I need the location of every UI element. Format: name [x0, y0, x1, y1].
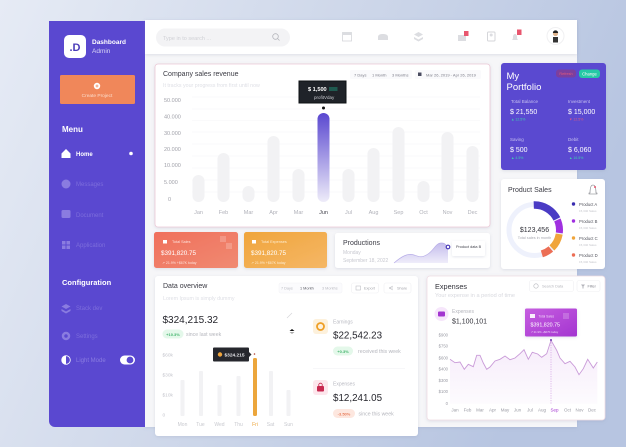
- search box: Search Data: [542, 284, 564, 288]
- nav: stack dev: Stack dev: [76, 306, 102, 312]
- logo: [64, 35, 86, 58]
- month labels: Aug: [369, 210, 378, 216]
- avatar: [547, 28, 564, 44]
- search box: Type in to search ...: [163, 36, 211, 42]
- stat: earnings: received this week: [358, 349, 401, 355]
- nav: home: [62, 149, 133, 158]
- month labels: Apr: [489, 408, 496, 412]
- share button: Share: [397, 286, 407, 290]
- card: total expenses: ↗ 21.9% +$67K today: [251, 261, 286, 265]
- stat: expenses: Expenses: [333, 382, 355, 388]
- card: total sales: Total Sales: [172, 240, 191, 244]
- y axis: [439, 332, 449, 406]
- stat: total balance: [510, 99, 539, 122]
- expenses value: $1,100,101: [452, 318, 487, 326]
- y axis: $10k: [162, 392, 174, 398]
- legend: Product D: [579, 253, 598, 258]
- range tabs: [350, 70, 481, 79]
- stat: total balance: ▲ 12.5%: [511, 118, 525, 122]
- y axis: $900: [439, 332, 449, 338]
- bar chart: [180, 358, 290, 416]
- legend: Product A: [579, 202, 597, 207]
- panel: company sales revenue: [155, 64, 490, 227]
- month labels: Mar: [244, 210, 253, 216]
- card: total expenses: $391,820.75: [251, 250, 287, 257]
- panel: expenses: [427, 276, 605, 420]
- share button: [384, 283, 411, 293]
- legend: 15,340 Sales: [579, 209, 597, 213]
- stat: investment: ▼ 12.5%: [569, 118, 583, 122]
- card: productions: Monday: [343, 250, 361, 256]
- month labels: Jan: [451, 408, 459, 412]
- stat: saving: Saving: [510, 137, 524, 142]
- mini tooltip: Product data B: [456, 245, 482, 249]
- mini tooltip: [452, 241, 485, 256]
- card: total sales: [154, 232, 238, 268]
- stat: debit: $ 6,060: [568, 147, 591, 154]
- tooltip: profitVday: [314, 95, 335, 100]
- stat: investment: Investment: [568, 99, 591, 104]
- change badge: [162, 330, 222, 338]
- card: productions: September 18, 2022: [343, 258, 389, 264]
- y axis: 0: [168, 197, 171, 203]
- stat: expenses: -3.50%: [338, 411, 351, 416]
- purple tooltip card: [525, 308, 577, 336]
- month labels: Nov: [443, 210, 453, 216]
- range tabs: 1 Month: [300, 286, 314, 290]
- nav: application: [62, 241, 105, 249]
- y axis: 10.000: [164, 163, 181, 169]
- day labels: Sun: [284, 422, 293, 428]
- divider: [313, 368, 405, 370]
- purple tooltip card: $391,820.75: [530, 322, 560, 328]
- brand name: Dashboard: [92, 39, 126, 46]
- export button: [352, 283, 378, 293]
- day labels: Thu: [234, 422, 243, 428]
- tooltip: [213, 348, 255, 362]
- nav: settings: [63, 333, 98, 340]
- top bar: [145, 20, 577, 54]
- range tabs: 7 Days: [354, 72, 366, 78]
- panel: data overview: [155, 276, 418, 436]
- range tabs: 3 Months: [392, 72, 408, 78]
- card: productions: [335, 233, 490, 268]
- month labels: Nov: [575, 408, 584, 412]
- create project button: [60, 75, 135, 104]
- month labels: [451, 408, 597, 412]
- stat: investment: [568, 99, 595, 122]
- month labels: May: [501, 408, 510, 412]
- donut label: $123,456: [520, 227, 549, 234]
- change badge: +10.3%: [166, 332, 180, 337]
- nav: document: [62, 210, 104, 219]
- y axis: $750: [439, 344, 449, 348]
- legend: 15,340 Sales: [579, 226, 597, 230]
- bar chart: [192, 113, 478, 202]
- tooltip: $324.215: [224, 352, 245, 358]
- y axis: 40.000: [164, 114, 181, 120]
- stat: debit: ▲ 16.5%: [569, 156, 583, 160]
- line chart: [450, 339, 597, 404]
- nav: application: Application: [76, 243, 105, 249]
- panel: my portfolio: Portfolio: [506, 82, 541, 93]
- stat: expenses: since this week: [358, 411, 394, 417]
- search box: [156, 28, 290, 46]
- legend: 15,340 Sales: [579, 243, 597, 247]
- y axis: $600: [439, 356, 449, 360]
- stat: expenses: [313, 380, 394, 418]
- y axis: $400: [439, 366, 449, 372]
- month labels: Oct: [419, 210, 428, 216]
- gridlines: [192, 97, 480, 192]
- range tabs: 3 Months: [322, 286, 338, 290]
- range tabs: [279, 283, 342, 293]
- brand name: [92, 39, 126, 55]
- month labels: Jul: [527, 408, 533, 412]
- month labels: Mar: [476, 408, 484, 412]
- stat: debit: Debit: [568, 137, 579, 142]
- stat: earnings: [313, 319, 401, 356]
- month labels: Feb: [464, 408, 472, 412]
- menu heading: Menu: [62, 125, 83, 134]
- y axis: $60k: [162, 352, 174, 358]
- month labels: Aug: [538, 408, 546, 412]
- day labels: Mon: [178, 422, 188, 428]
- legend: [572, 202, 598, 264]
- heading: Product Sales: [508, 187, 552, 194]
- subheading: It tracks your progress from first until now: [163, 83, 260, 89]
- y axis: [162, 352, 174, 418]
- expand and sort icons: [287, 313, 294, 334]
- stat: saving: $ 500: [510, 147, 528, 154]
- legend: 15,340 Sales: [579, 260, 597, 264]
- sidebar: [49, 21, 145, 427]
- donut label: Total sales in month: [518, 236, 551, 240]
- range tabs: 7 Days: [281, 286, 293, 290]
- range tabs: 1 Month: [372, 72, 386, 78]
- create project button: Create Project: [82, 93, 113, 99]
- change button: Change: [582, 72, 598, 76]
- month labels: Dec: [468, 210, 478, 216]
- month labels: Sep: [550, 408, 559, 412]
- tooltip: [299, 81, 346, 110]
- nav: messages: Messages: [76, 182, 103, 188]
- month labels: Jun: [514, 408, 522, 412]
- nav: stack dev: [62, 304, 102, 314]
- y axis: 0: [446, 401, 449, 406]
- stat: saving: ▲ 4.5%: [511, 156, 523, 160]
- month labels: [194, 210, 478, 216]
- y axis: 5.000: [164, 180, 178, 186]
- panel: product sales: [499, 179, 605, 269]
- purple tooltip card: Total Sales: [538, 314, 554, 318]
- stat: saving: [510, 137, 528, 160]
- stat: earnings: $22,542.23: [333, 330, 383, 342]
- configuration heading: Configuration: [62, 278, 112, 287]
- month labels: Jun: [319, 210, 328, 216]
- tooltip: $ 1,500: [308, 87, 327, 93]
- card: total expenses: [244, 232, 327, 268]
- export button: Export: [364, 286, 376, 290]
- search box: [530, 280, 574, 292]
- day labels: Fri: [252, 422, 258, 428]
- brand name: Admin: [92, 48, 111, 55]
- stat: total balance: Total Balance: [511, 99, 539, 104]
- y axis: 0: [162, 412, 166, 418]
- panel: my portfolio: [501, 63, 606, 170]
- nav: document: Document: [76, 213, 104, 219]
- legend: Product C: [579, 236, 598, 241]
- filter button: Filter: [588, 284, 597, 288]
- stat: investment: $ 15,000: [568, 109, 595, 116]
- notification badges: [464, 30, 522, 36]
- stat: expenses: $12,241.05: [333, 393, 383, 404]
- day labels: Tue: [196, 422, 205, 428]
- y axis: 30.000: [164, 131, 181, 137]
- logo: .D: [70, 42, 81, 54]
- purple tooltip card: ↗ 21.9% +$67K today: [530, 330, 559, 334]
- month labels: Apr: [269, 210, 278, 216]
- bell icon: [589, 185, 597, 194]
- month labels: Jul: [345, 210, 352, 216]
- month labels: Jan: [194, 210, 203, 216]
- subheading: Lorem Ipsum is simply dummy: [163, 296, 235, 302]
- nav: home: Home: [76, 152, 93, 158]
- nav: light mode: [62, 356, 135, 364]
- refresh button: Refresh: [559, 72, 573, 76]
- nav: messages: [62, 180, 103, 188]
- expenses icon: [434, 307, 448, 321]
- day labels: [178, 422, 293, 428]
- y axis: 20.000: [164, 147, 181, 153]
- month labels: Oct: [564, 408, 572, 412]
- area chart: [394, 243, 448, 263]
- nav: settings: Settings: [76, 334, 98, 340]
- stat: earnings: +0.3%: [337, 349, 349, 354]
- card: total sales: ↗ 21.9% +$67K today: [162, 261, 197, 265]
- month labels: Sep: [394, 210, 403, 216]
- card: productions: Productions: [343, 240, 380, 247]
- heading: Company sales revenue: [163, 71, 239, 78]
- main window panel: [145, 20, 577, 427]
- month labels: Mar: [294, 210, 303, 216]
- total value: $324,215.32: [162, 315, 219, 326]
- expenses value: Expenses: [452, 309, 474, 315]
- card: total sales: $391,820.75: [161, 250, 197, 257]
- day labels: Wed: [214, 422, 225, 428]
- expenses value: [452, 309, 487, 326]
- heading: Data overview: [163, 283, 208, 290]
- stat: earnings: Earnings: [333, 320, 353, 326]
- y axis: $30k: [162, 372, 174, 378]
- heading: My: [506, 71, 519, 82]
- heading: Expenses: [435, 282, 467, 291]
- filter button: [577, 280, 600, 292]
- subheading: Your expense in a period of time: [435, 293, 515, 299]
- donut chart: [499, 195, 570, 265]
- donut label: [518, 227, 551, 240]
- y axis: [164, 98, 181, 203]
- change badge: since last week: [186, 332, 222, 338]
- stat: total balance: $ 21,550: [510, 109, 537, 116]
- month labels: Feb: [219, 210, 228, 216]
- y axis: 50.000: [164, 98, 181, 104]
- day labels: Sat: [267, 422, 275, 428]
- legend: Product B: [579, 219, 598, 224]
- y axis: $300: [439, 378, 449, 383]
- toolbar icons: [342, 32, 518, 42]
- y axis: $100: [439, 389, 449, 394]
- stat: debit: [568, 137, 591, 160]
- month labels: Dec: [588, 408, 597, 412]
- card: total expenses: Total Expenses: [261, 240, 287, 244]
- range tabs: Mar 26, 2019 - Apr 26, 2019: [426, 72, 477, 78]
- nav: light mode: Light Mode: [76, 358, 106, 364]
